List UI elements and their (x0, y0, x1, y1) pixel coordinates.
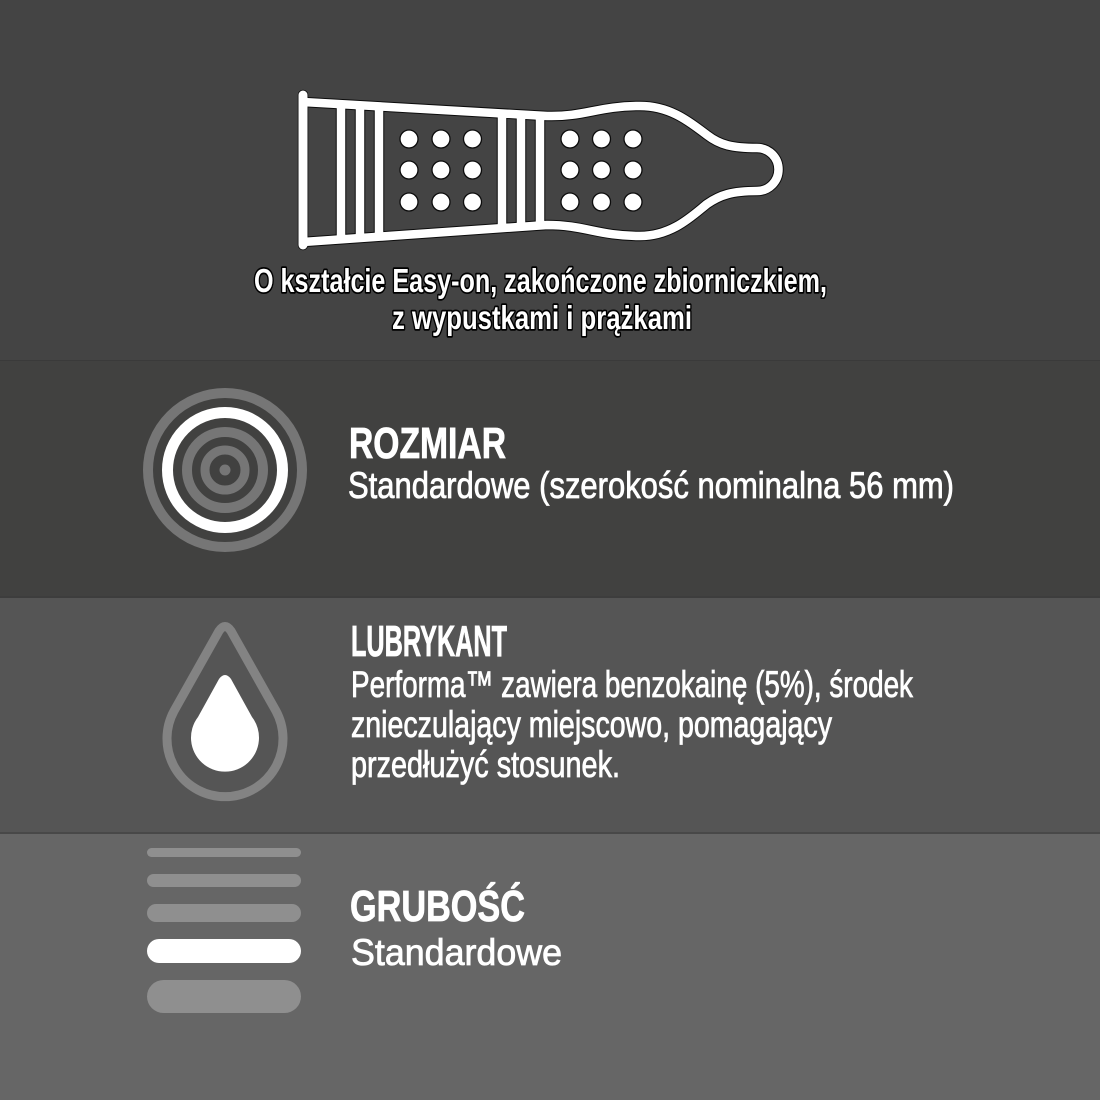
heading: size: ROZMIAR (349, 419, 506, 468)
caption: shape description: z wypustkami i prążkami (392, 299, 692, 336)
icon: thickness bars (147, 848, 301, 1013)
heading: thickness: GRUBOŚĆ (350, 881, 525, 931)
text: lubricant description (351, 664, 913, 785)
panel: thickness (147, 848, 562, 1013)
text: thickness description: Standardowe (351, 932, 562, 973)
panel: shape (254, 95, 827, 336)
caption: shape description (254, 262, 827, 336)
caption: shape description: O kształcie Easy-on, zakończone zbiorniczkiem, (254, 262, 827, 299)
icon: condom outline with ribs and dots (303, 95, 778, 245)
icon: water drop (167, 626, 283, 797)
panel: lubricant (167, 617, 913, 797)
text: lubricant description: przedłużyć stosunek. (351, 744, 620, 785)
heading: lubricant: LUBRYKANT (351, 617, 507, 666)
text: lubricant description: znieczulający miejscowo, pomagający (351, 704, 832, 745)
panel: size (148, 393, 954, 547)
icon: concentric circles (148, 393, 302, 547)
text: lubricant description: Performa™ zawiera benzokainę (5%), środek (351, 664, 913, 705)
text: size description: Standardowe (szerokość nominalna 56 mm) (348, 465, 954, 506)
